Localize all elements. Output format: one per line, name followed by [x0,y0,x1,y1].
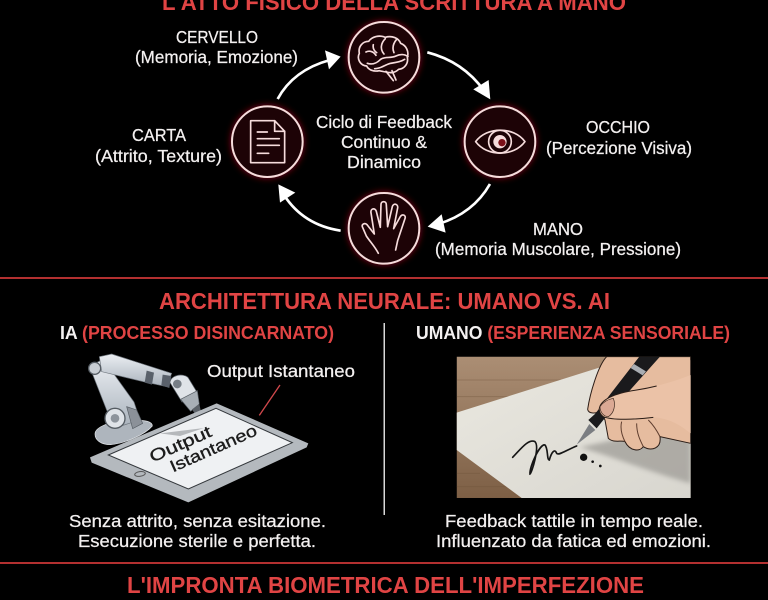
icon: brain node [347,21,421,94]
pen [588,357,660,428]
wood table [457,357,691,498]
heading: biometric imprint: L'IMPRONTA BIOMETRICA DELL'IMPERFEZIONE [127,572,644,598]
robot lower arm [89,359,140,427]
pen shadow [160,428,204,436]
arrow: eye to hand [428,184,490,233]
callout line [259,385,280,415]
label: brain: CERVELLO [176,27,258,47]
label: hand: (Memoria Muscolare, Pressione) [435,239,681,259]
caption: AI [69,511,326,551]
label: hand: MANO [533,219,583,239]
tablet text [146,405,260,482]
icon: eye node [463,105,537,178]
robot upper arm [99,354,172,387]
divider [0,277,768,279]
divider [0,562,768,564]
tablet text: Istantaneo [167,421,260,476]
caption: human: Influenzato da fatica ed emozioni. [436,531,711,551]
label: brain: (Memoria, Emozione) [135,47,298,67]
hand shadow [580,433,691,483]
paper sheet [457,360,693,498]
tablet screen [108,408,292,489]
arrow: hand to paper [278,184,341,231]
back of hand and wrist [588,357,691,450]
thumb [599,375,691,433]
label: eye [546,117,692,158]
feedback cycle diagram [95,21,692,265]
heading: neural architecture: ARCHITETTURA NEURALE: UMANO VS. AI [159,288,610,314]
tablet text: Output [146,422,215,466]
label: eye: OCCHIO [586,117,650,137]
heading: human: UMANO (ESPERIENZA SENSORIALE) [416,322,730,343]
tablet home button [134,471,146,477]
label: cycle centre: Dinamico [347,152,421,172]
panel: human [416,322,730,551]
heading: AI: IA (PROCESSO DISINCARNATO) [60,322,334,343]
caption: human: Feedback tattile in tempo reale. [445,511,703,531]
label: brain [135,27,298,67]
illustration: hand signing paper [457,357,693,498]
label: eye: (Percezione Visiva) [546,138,692,158]
label: paper: CARTA [132,125,186,145]
caption: human [436,511,711,551]
robot shoulder joint [105,408,125,428]
callout label: Output Istantaneo [207,361,355,381]
icon: document node [231,105,304,178]
finger creases [621,420,660,447]
signature [513,441,577,474]
robot wrist [170,375,197,402]
robot elbow joint [89,362,101,374]
caption: AI: Senza attrito, senza esitazione. [69,511,326,531]
ink blots [580,454,587,461]
robot base [95,420,152,445]
vertical divider [384,323,385,515]
label: cycle centre: Continuo & [341,132,427,152]
illustration: robot arm writing on tablet [89,354,308,502]
label: cycle centre [316,112,452,172]
icon: hand node [347,192,421,265]
label: cycle centre: Ciclo di Feedback [316,112,452,132]
tablet body [90,403,308,502]
panel: AI [60,322,355,551]
caption: AI: Esecuzione sterile e perfetta. [78,531,316,551]
arrow: paper to brain [278,50,341,99]
arrow: brain to eye [427,52,490,99]
label: paper: (Attrito, Texture) [95,146,222,166]
label: paper [95,125,222,166]
label: hand [435,219,681,259]
